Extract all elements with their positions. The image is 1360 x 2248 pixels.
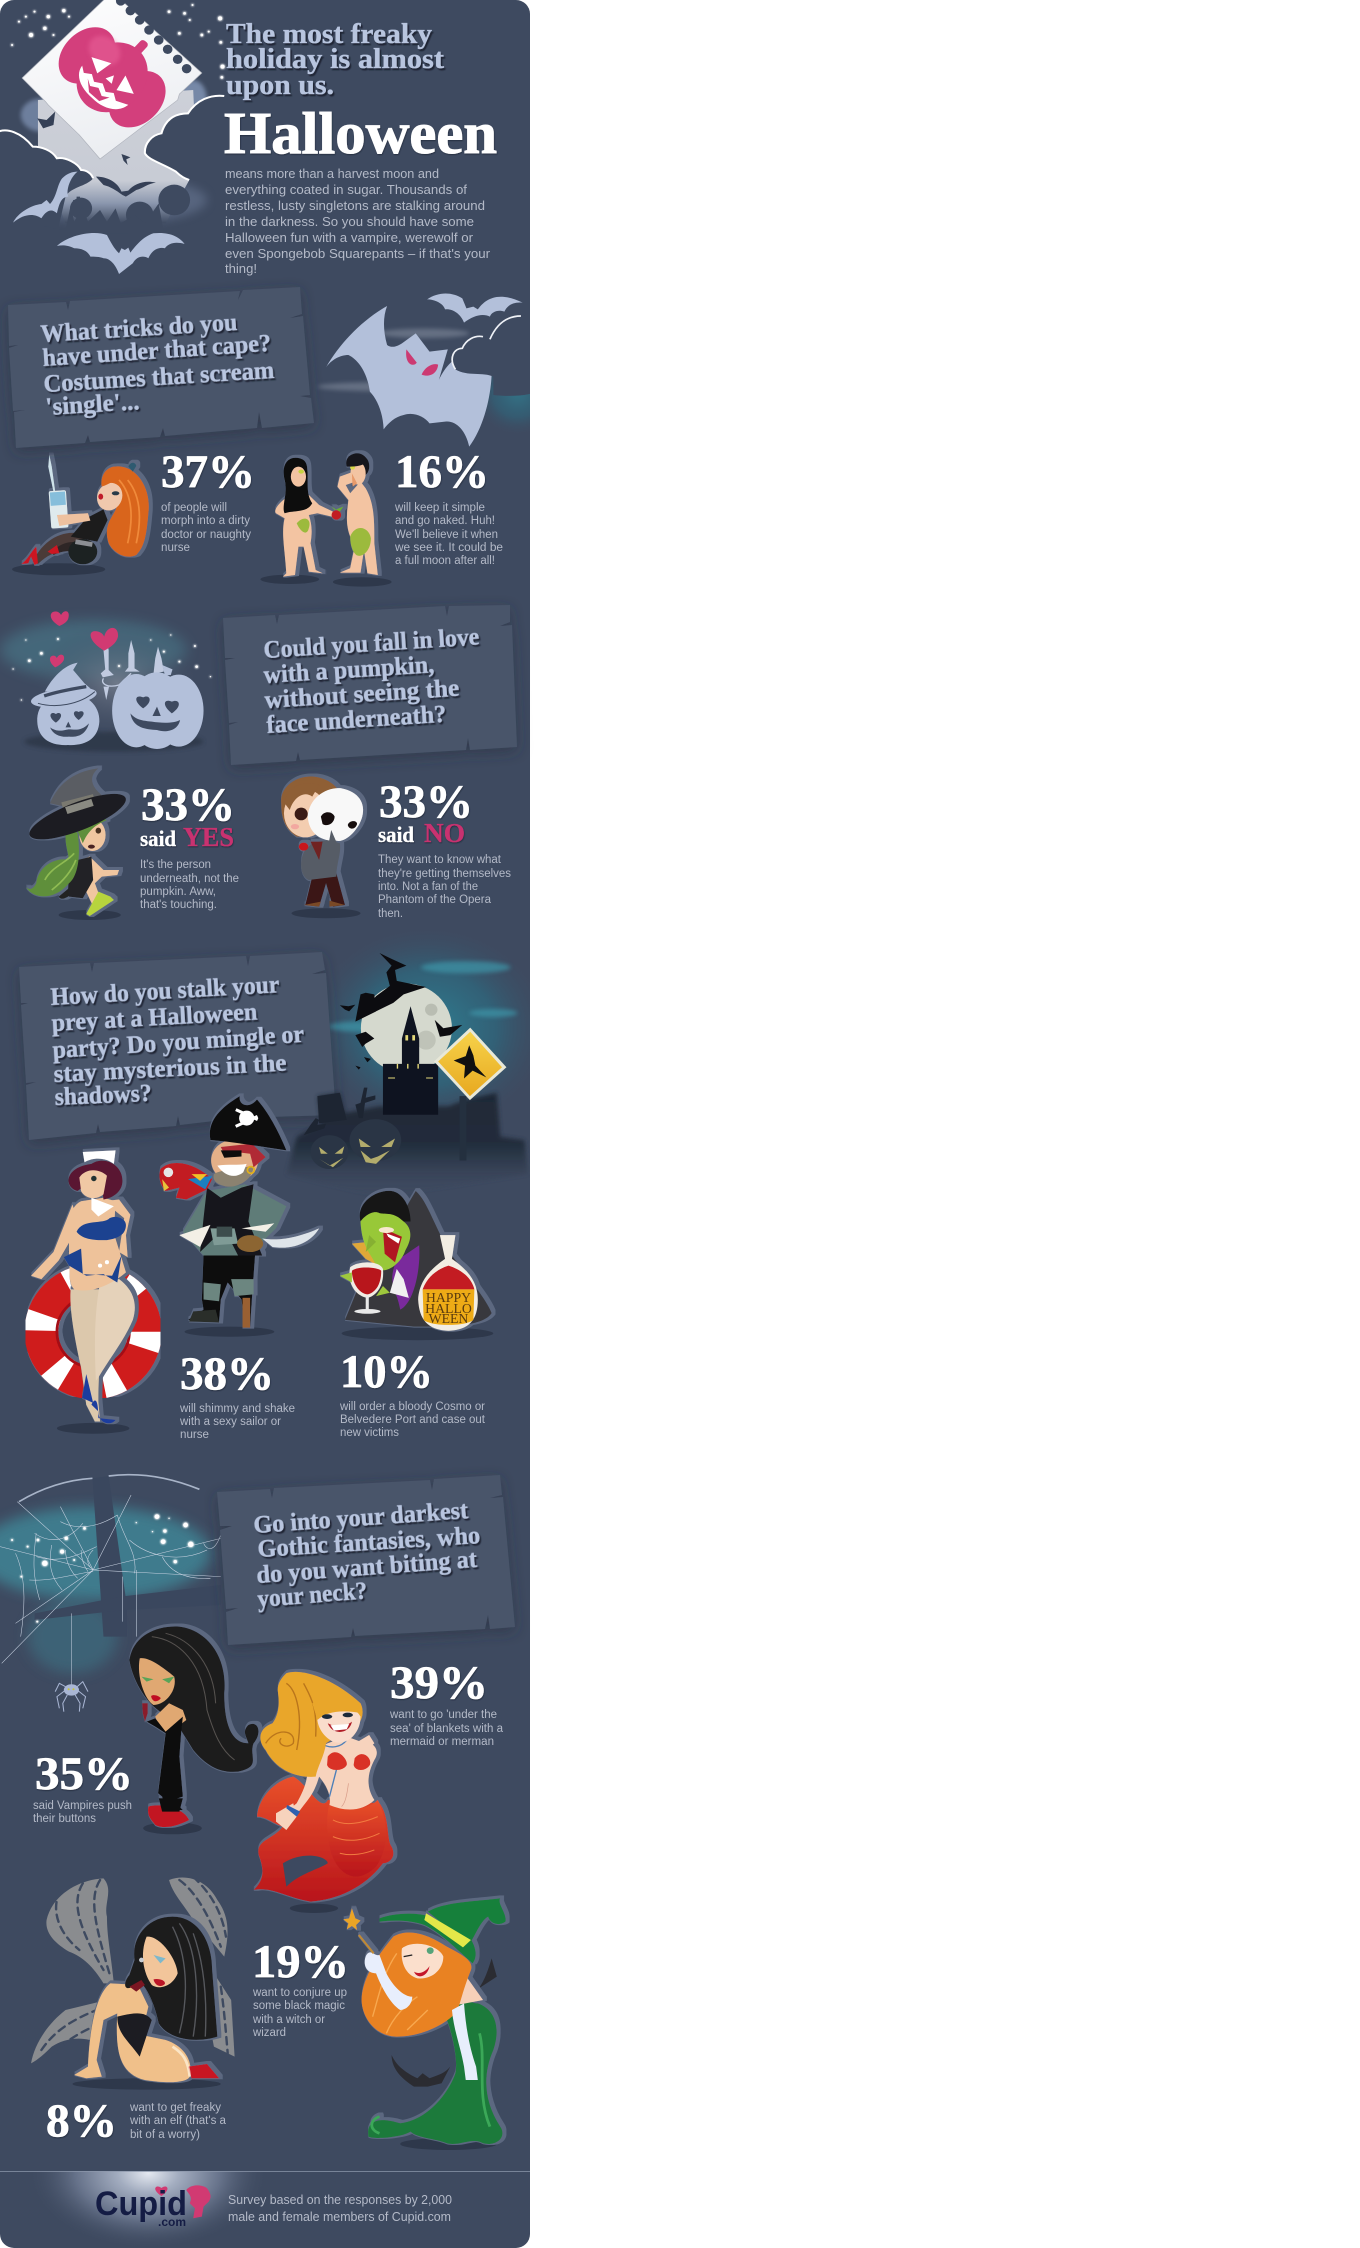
panel: footer <box>0 2097 531 2248</box>
stat: 35%: 35% <box>35 1748 133 1800</box>
stat: 37%: morph into a dirty <box>161 515 250 527</box>
stat: 16%: and go naked. Huh! <box>395 515 495 527</box>
stat: 33% said no: Phantom of the Opera <box>378 894 492 906</box>
panel: vampire character: WEEN <box>429 1311 469 1326</box>
stat: 16%: we see it. It could be <box>394 542 503 554</box>
question heading: 'single'... <box>45 388 140 421</box>
stat: 38%: nurse <box>180 1429 209 1441</box>
panel: witch character <box>24 768 131 920</box>
panel: vampire character: HALLO <box>425 1301 472 1316</box>
intro paragraph: everything coated in sugar. Thousands of <box>225 183 467 197</box>
footer note: male and female members of Cupid.com <box>228 2210 451 2224</box>
stat: 38%: 38% <box>180 1348 274 1400</box>
panel: green witch character <box>343 1898 506 2150</box>
logo: Cupid.com: Cupid <box>95 2185 187 2223</box>
stat: 35%: said Vampires push <box>33 1800 132 1812</box>
intro paragraph: thing! <box>225 262 257 276</box>
castle <box>383 1006 438 1115</box>
icon: hearts <box>50 611 118 667</box>
icon: spider <box>55 1613 88 1712</box>
spider web <box>0 1495 221 1663</box>
panel: infographic background <box>0 0 530 2248</box>
stat: 33% said no: NO <box>424 818 465 848</box>
dark cloud <box>451 315 530 396</box>
question heading: Go into your darkest <box>253 1497 470 1539</box>
moon behind clouds <box>21 80 207 223</box>
teal mist <box>0 620 204 752</box>
panel: question 3 placard <box>19 952 336 1140</box>
question heading: face underneath? <box>266 701 447 739</box>
graves and hills <box>289 1088 527 1174</box>
stat: 10%: Belvedere Port and case out <box>340 1414 486 1426</box>
stars <box>11 4 225 79</box>
headline: The most freaky <box>226 18 433 50</box>
wing texture <box>41 1877 228 2057</box>
question heading: your neck? <box>256 1577 368 1613</box>
stat: 33% said no: They want to know what <box>378 854 502 866</box>
stat: 39% <box>389 1657 504 1748</box>
question heading: have under that cape? <box>42 330 272 372</box>
intro paragraph: in the darkness. So you should have some <box>225 215 474 229</box>
intro paragraph <box>225 167 491 276</box>
stat: 37%: of people will <box>161 502 227 514</box>
glowing pumpkins <box>310 1119 401 1169</box>
question heading: Gothic fantasies, who <box>257 1522 481 1563</box>
stat: 33% said no: they're getting themselves <box>378 868 511 880</box>
stat: 16%: 16% <box>395 446 489 498</box>
fairy wings <box>31 1877 235 2063</box>
panel: sailor character <box>31 1150 145 1434</box>
panel: window and spider web scene <box>0 1475 221 1712</box>
icon: cupid heart <box>155 2186 168 2196</box>
mist <box>317 329 469 391</box>
stat: 33% said no: into. Not a fan of the <box>378 881 478 893</box>
stat: 39%: mermaid or merman <box>390 1736 494 1748</box>
stat: 16% <box>394 446 503 567</box>
question heading: without seeing the <box>264 675 460 714</box>
icon: witch hat pumpkin <box>30 663 99 745</box>
stat: 8%: 8% <box>46 2095 117 2147</box>
question heading: How do you stalk your <box>50 971 280 1011</box>
footer glow <box>0 2097 531 2248</box>
stat: 19%: wizard <box>252 2027 286 2039</box>
stars <box>12 634 211 701</box>
question heading: Costumes that scream <box>43 357 275 398</box>
stat: 8% <box>46 2095 227 2147</box>
notebook paper <box>22 0 202 159</box>
question heading <box>40 309 275 421</box>
title: Halloween: Halloween <box>224 100 497 166</box>
cat and bats <box>340 993 462 1070</box>
stat: 19% <box>252 1936 349 2039</box>
panel: header illustration <box>0 0 225 274</box>
stat: 33% said yes: YES <box>183 822 234 852</box>
panel: vampire character <box>340 1191 493 1340</box>
stat: 37%: 37% <box>161 446 255 498</box>
stat: 33% said yes: said <box>140 826 176 851</box>
stat: 33% said yes: that's touching. <box>140 899 217 911</box>
icon: small bat <box>427 293 523 323</box>
question heading: prey at a Halloween <box>51 999 258 1037</box>
stat: 37% <box>161 446 255 554</box>
icon: cupid figure <box>186 2185 211 2218</box>
teal night sky <box>330 952 520 1104</box>
candelabra <box>101 640 164 700</box>
teal window glow <box>0 1507 210 1673</box>
stat: 33% said yes: 33% <box>141 779 235 831</box>
stat: 33% said no: 33% <box>379 776 473 828</box>
intro paragraph: Halloween fun with a vampire, werewolf or <box>225 231 474 245</box>
window frame <box>19 1475 221 1637</box>
blue moon glow <box>488 376 530 423</box>
stat: 38%: will shimmy and shake <box>179 1403 295 1415</box>
stat: 35% <box>33 1748 133 1825</box>
stat: 39%: sea' of blankets with a <box>390 1723 504 1735</box>
panel: phantom character <box>281 776 363 918</box>
question heading: shadows? <box>54 1080 152 1111</box>
panel: question 2 placard <box>223 605 517 765</box>
panel: haunted night scene <box>286 953 528 1198</box>
question heading <box>263 623 480 739</box>
road sign <box>434 1028 506 1161</box>
stars <box>11 1514 194 1623</box>
question heading: Could you fall in love <box>263 623 480 664</box>
bat silhouettes <box>13 112 185 274</box>
left cloud <box>0 130 93 227</box>
panel: pumpkin love scene <box>0 611 211 752</box>
panel: vampire character: HAPPY <box>426 1290 471 1305</box>
stat: 39%: 39% <box>390 1657 488 1709</box>
panel: pirate character <box>159 1096 319 1337</box>
headline <box>226 18 444 101</box>
panel: artwork layer <box>0 0 562 2248</box>
stat: 38%: with a sexy sailor or <box>179 1416 281 1428</box>
stat: 33% said yes: It's the person <box>140 859 211 871</box>
headline: upon us. <box>226 69 334 101</box>
icon: big bat <box>326 306 492 447</box>
intro paragraph: means more than a harvest moon and <box>225 167 439 181</box>
question heading <box>50 971 305 1111</box>
intro paragraph: restless, lusty singletons are stalking around <box>225 199 485 213</box>
question heading: with a pumpkin, <box>263 651 435 689</box>
panel: bat and cloud scene <box>318 294 530 446</box>
panel: question 1 placard <box>8 287 314 448</box>
question heading: stay mysterious in the <box>53 1050 287 1088</box>
question heading <box>253 1497 481 1613</box>
stat: 35%: their buttons <box>33 1813 96 1825</box>
panel: intro text <box>224 18 497 276</box>
stat: 8%: want to get freaky <box>129 2102 221 2114</box>
stat: 33% said yes: underneath, not the <box>140 873 239 885</box>
panel: dark fairy character <box>31 1877 235 2090</box>
stat: 10%: will order a bloody Cosmo or <box>339 1401 485 1413</box>
panel: mermaid character <box>254 1672 393 1913</box>
footer note: Survey based on the responses by 2,000 <box>228 2193 452 2207</box>
question heading: What tricks do you <box>40 309 238 348</box>
question heading: party? Do you mingle or <box>52 1021 305 1064</box>
stat: 16%: a full moon after all! <box>395 555 495 567</box>
stat: 19%: 19% <box>252 1936 349 1988</box>
panel: naked couple characters <box>260 453 392 587</box>
stat: 10% <box>339 1346 486 1439</box>
full moon <box>361 984 452 1073</box>
stat: 33% said no: then. <box>378 908 403 920</box>
stat: 8%: with an elf (that's a <box>129 2115 227 2127</box>
logo: Cupid.com: .com <box>158 2215 186 2229</box>
footer note <box>228 2193 452 2224</box>
icon: pink pumpkin <box>58 27 166 128</box>
panel: nurse character <box>12 455 149 575</box>
headline: holiday is almost <box>226 43 444 75</box>
panel: vampire woman character <box>129 1626 258 1834</box>
stat: 39%: want to go 'under the <box>389 1709 497 1721</box>
stat: 10%: 10% <box>340 1346 433 1398</box>
stat: 10%: new victims <box>340 1427 399 1439</box>
stat: 16%: will keep it simple <box>394 502 485 514</box>
stat: 33% said yes <box>140 779 239 911</box>
stat: 37%: doctor or naughty <box>161 529 251 541</box>
intro paragraph: even Spongebob Squarepants – if that's your <box>225 247 491 261</box>
stat: 19%: with a witch or <box>252 2014 325 2026</box>
stat: 38% <box>179 1348 295 1441</box>
icon: dark bats <box>392 1958 497 2087</box>
stat: 16%: We'll believe it when <box>395 529 498 541</box>
icon: heart eyes pumpkin <box>112 665 204 749</box>
flying witch silhouette <box>355 953 426 1022</box>
stat: 8%: bit of a worry) <box>130 2129 200 2141</box>
stat: 33% said no: said <box>378 822 414 847</box>
stat: 19%: want to conjure up <box>252 1987 347 1999</box>
stat: 19%: some black magic <box>253 2000 345 2012</box>
question heading: do you want biting at <box>255 1546 478 1589</box>
graveyard silhouette <box>68 184 190 226</box>
panel: question 4 placard <box>217 1475 515 1645</box>
stat: 37%: nurse <box>161 542 190 554</box>
stat: 33% said yes: pumpkin. Aww, <box>140 886 216 898</box>
stat: 33% said no <box>378 776 511 920</box>
right cloud <box>145 96 224 182</box>
